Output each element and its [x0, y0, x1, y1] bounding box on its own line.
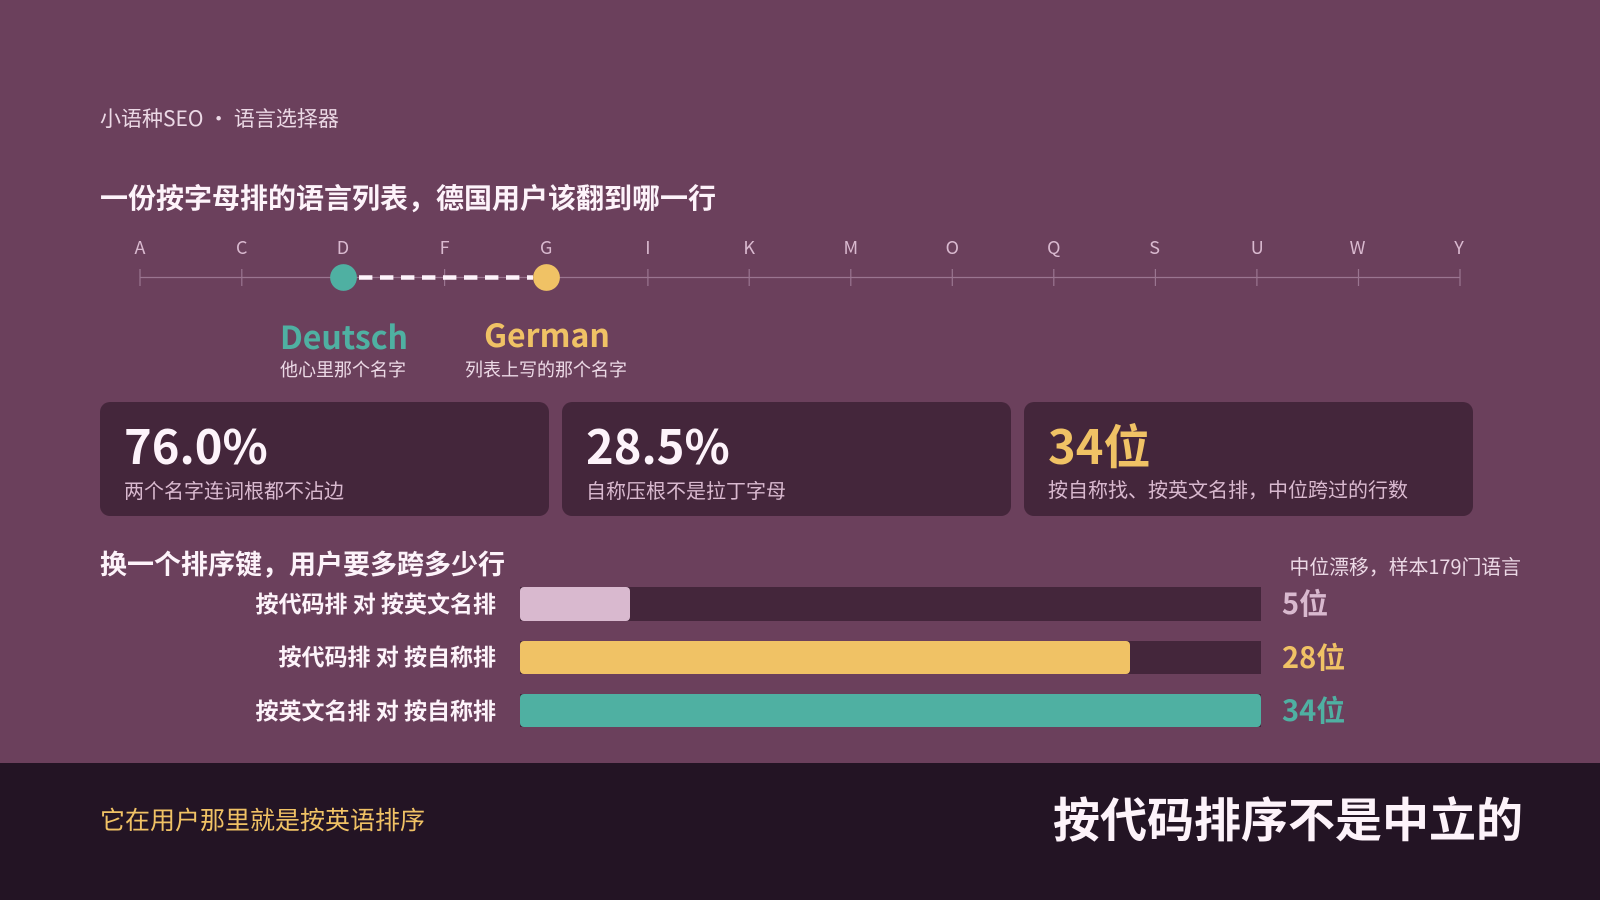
alphabet axis: W — [1350, 234, 1366, 260]
alphabet axis: M — [843, 234, 858, 260]
value 3: 34位 — [1282, 688, 1345, 730]
stat value: 76.0% — [124, 409, 268, 478]
stat caption: 自称压根不是拉丁字母 — [586, 475, 786, 504]
alphabet axis: I — [645, 234, 651, 260]
bar chart — [256, 581, 1345, 730]
footer band — [0, 763, 1600, 900]
alphabet axis: O — [946, 234, 959, 260]
footer conclusion: 按代码排序不是中立的 — [1053, 782, 1523, 851]
chart note: 中位漂移，样本179门语言 — [1290, 551, 1521, 580]
stat value: 28.5% — [586, 409, 730, 478]
marker label: Deutsch: Deutsch — [280, 313, 408, 359]
row label 2: 按代码排 对 按自称排 — [279, 638, 496, 672]
marker label: German: German — [484, 311, 610, 357]
alphabet axis: G — [540, 234, 552, 260]
alphabet axis: D — [337, 234, 349, 260]
stat card: 34位 — [1024, 402, 1473, 516]
value 1: 5位 — [1282, 581, 1328, 623]
stat caption: 两个名字连词根都不沾边 — [124, 475, 344, 504]
marker note: Deutsch: 他心里那个名字 — [280, 356, 406, 382]
eyebrow: 小语种SEO ・ 语言选择器 — [100, 103, 339, 133]
alphabet axis: U — [1251, 234, 1264, 260]
bar 3 — [520, 694, 1261, 727]
alphabet axis: K — [743, 234, 755, 260]
stat value: 34位 — [1048, 409, 1150, 478]
alphabet axis: Q — [1047, 234, 1060, 260]
row label 1: 按代码排 对 按英文名排 — [256, 585, 496, 619]
value 2: 28位 — [1282, 635, 1345, 677]
footer note: 它在用户那里就是按英语排序 — [100, 801, 425, 837]
stat card: 28.5% — [562, 402, 1011, 516]
alphabet axis: S — [1149, 234, 1160, 260]
stat card: 76.0% — [100, 402, 549, 516]
bar 2 — [520, 641, 1261, 674]
alphabet axis: A — [135, 234, 146, 260]
alphabet axis: C — [236, 234, 248, 260]
stat caption: 按自称找、按英文名排，中位跨过的行数 — [1048, 474, 1408, 503]
row label 3: 按英文名排 对 按自称排 — [256, 692, 496, 726]
alphabet axis — [134, 234, 1464, 291]
heading: sort key drift: 换一个排序键，用户要多跨多少行 — [100, 543, 505, 582]
marker note: German: 列表上写的那个名字 — [465, 356, 627, 382]
heading: alphabetical list: 一份按字母排的语言列表，德国用户该翻到哪一行 — [100, 177, 716, 217]
bar 1 — [520, 587, 1261, 621]
alphabet axis: Y — [1453, 234, 1464, 260]
alphabet axis: F — [440, 234, 450, 260]
